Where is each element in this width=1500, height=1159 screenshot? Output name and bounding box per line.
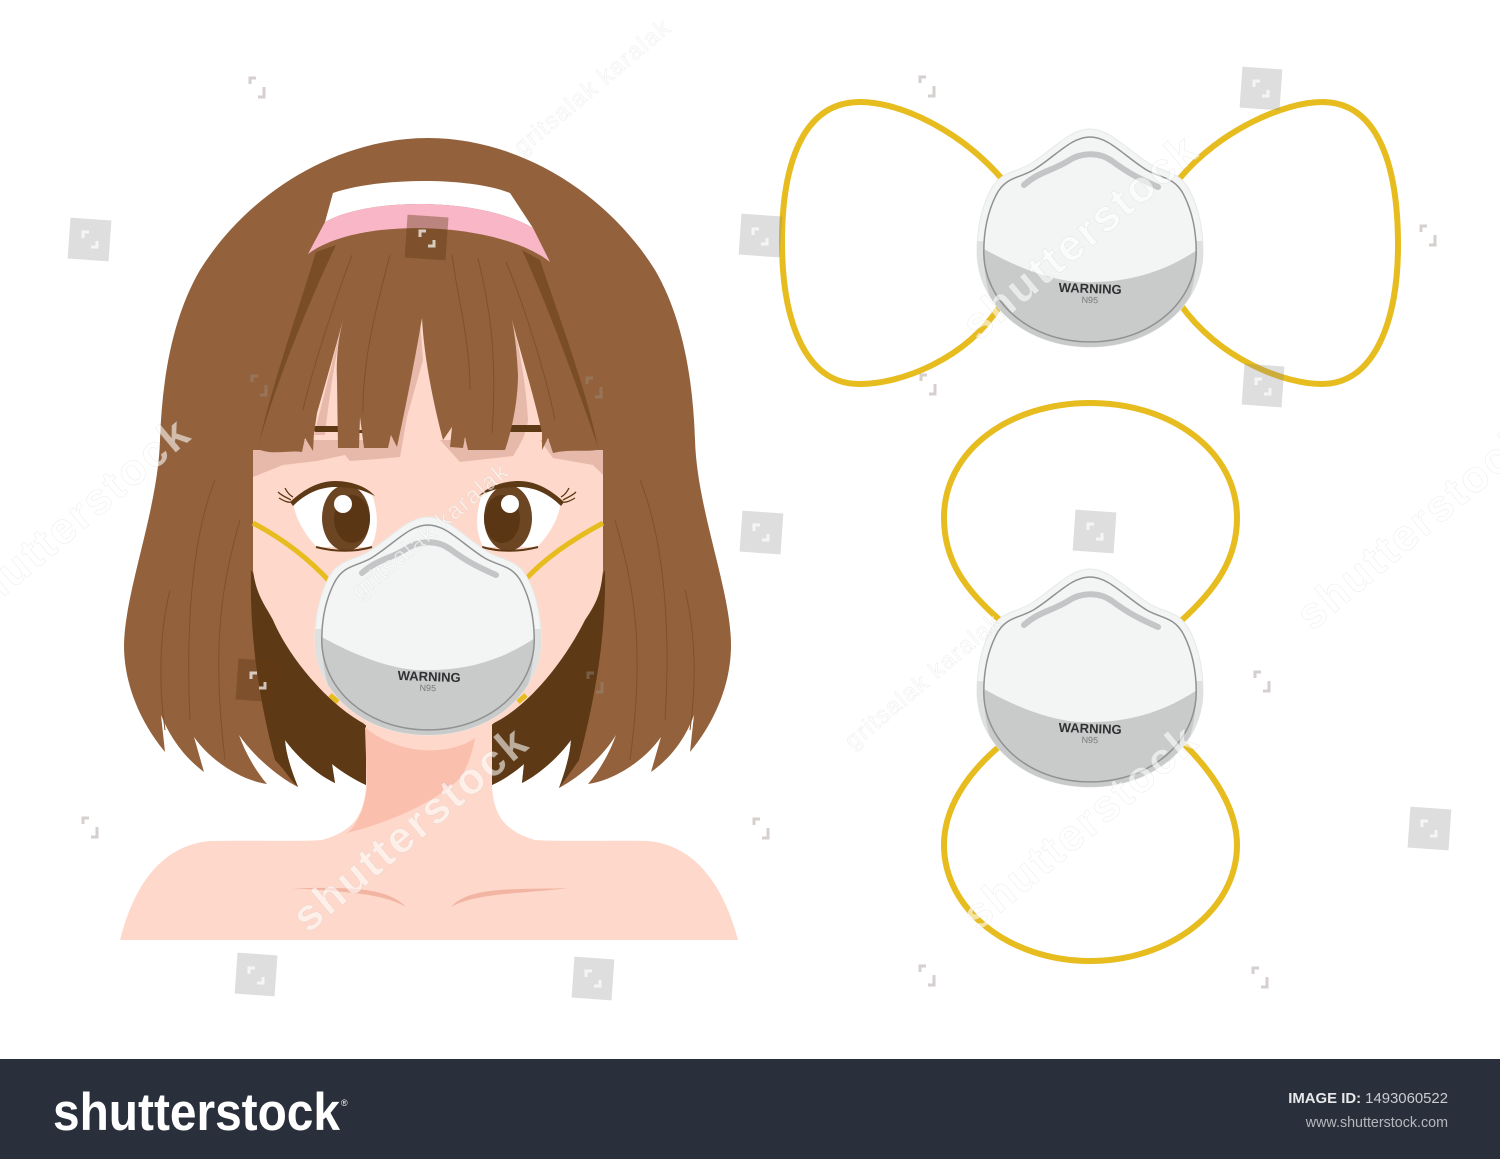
mask label: WARNING bbox=[1058, 720, 1122, 737]
ear straps bbox=[253, 523, 603, 702]
dark under hair right bbox=[488, 570, 605, 788]
watermark text: shutterstock bbox=[953, 125, 1207, 350]
collarbones bbox=[292, 888, 569, 907]
left eye bbox=[278, 481, 377, 551]
mask with straps spread sideways bbox=[782, 102, 1398, 384]
mask label: WARNING bbox=[1058, 280, 1122, 297]
mask label: N95 bbox=[1081, 735, 1098, 745]
mask with straps top and bottom bbox=[944, 403, 1237, 961]
yellow straps bbox=[944, 403, 1237, 961]
headband bbox=[308, 181, 550, 262]
hair back bbox=[124, 138, 731, 788]
front bangs bbox=[240, 250, 615, 453]
right eye bbox=[477, 481, 576, 551]
face mask bbox=[308, 517, 548, 742]
website: www.shutterstock.com bbox=[1305, 1115, 1448, 1131]
mask label: WARNING bbox=[397, 668, 461, 685]
bang shadow bbox=[253, 320, 603, 477]
mask body bbox=[970, 129, 1210, 354]
watermark text: gritsalak karalak bbox=[840, 608, 1007, 755]
yellow straps bbox=[782, 102, 1398, 384]
image id: IMAGE ID: 1493060522 bbox=[1288, 1091, 1448, 1107]
eyebrows bbox=[314, 425, 543, 433]
hair strands and side shading bbox=[161, 245, 694, 760]
face bbox=[253, 300, 603, 742]
mask label bbox=[1058, 280, 1122, 306]
mask label bbox=[397, 668, 461, 694]
mask label: N95 bbox=[419, 683, 436, 693]
watermark text: gritsalak karalak bbox=[347, 458, 514, 605]
mask label: N95 bbox=[1081, 295, 1098, 305]
small watermark marks bbox=[83, 77, 1435, 987]
woman wearing N95 mask bbox=[120, 138, 738, 940]
dark under hair left bbox=[251, 570, 370, 787]
watermark text: shutterstock bbox=[283, 717, 537, 942]
shutterstock logo: shutterstock bbox=[53, 1083, 340, 1142]
neck shadow bbox=[347, 727, 475, 833]
watermark text: gritsalak karalak bbox=[509, 14, 676, 161]
mask body bbox=[970, 569, 1210, 794]
shoulders and neck bbox=[120, 720, 738, 940]
watermark squares bbox=[68, 67, 1451, 1000]
mask label bbox=[1058, 720, 1122, 746]
watermark text: shutterstock bbox=[953, 715, 1207, 940]
footer bar bbox=[0, 1059, 1500, 1159]
shutterstock logo: ® bbox=[341, 1098, 348, 1108]
watermark brackets bbox=[83, 81, 1436, 986]
